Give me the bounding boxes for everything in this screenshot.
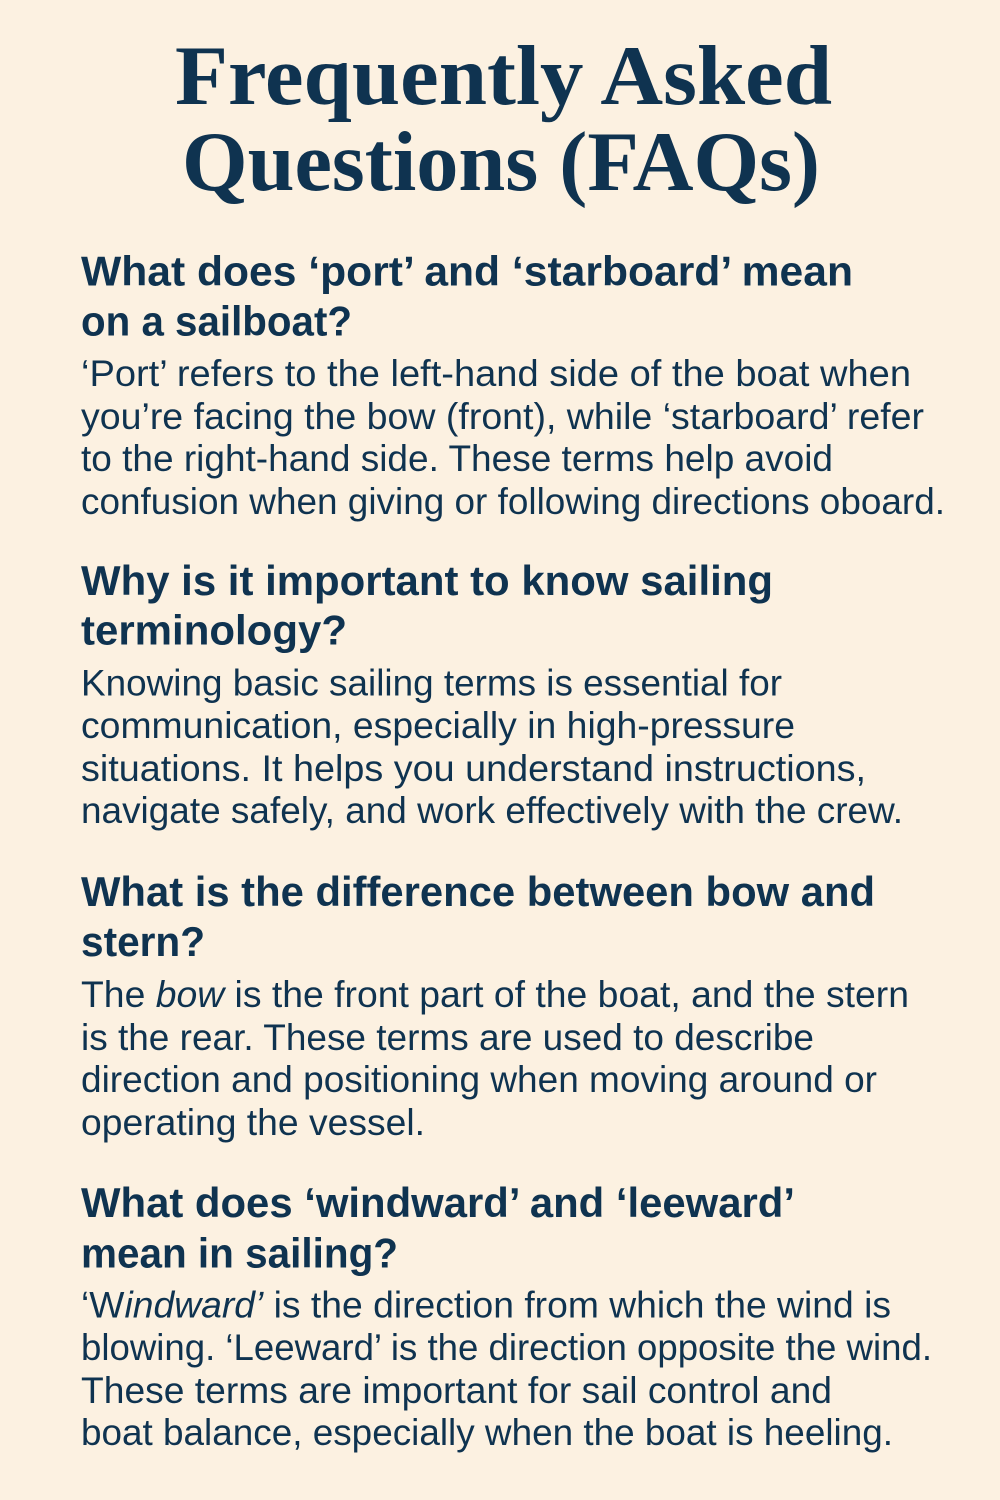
- panel: port and starboard: [81, 248, 945, 522]
- text block: bow and stern answer: direction and positioning when moving around or: [81, 1059, 877, 1100]
- text block: windward and leeward answer: [81, 1284, 932, 1453]
- text block: port and starboard answer: [81, 353, 945, 522]
- text block: bow and stern answer: operating the vessel.: [81, 1102, 425, 1143]
- panel: windward and leeward: [81, 1179, 932, 1453]
- text block: windward and leeward answer: boat balance, especially when the boat is heeling.: [81, 1412, 893, 1453]
- heading: port and starboard: [81, 248, 853, 344]
- text block: port and starboard answer: ‘Port’ refers to the left-hand side of the boat when: [81, 353, 911, 394]
- text block: sailing terminology answer: situations. It helps you understand instructions,: [81, 748, 866, 789]
- text block: sailing terminology answer: [81, 662, 903, 831]
- title: Questions (FAQs): [182, 115, 820, 209]
- heading: bow and stern: [81, 868, 875, 965]
- text block: port and starboard answer: confusion when giving or following directions oboard.: [81, 481, 945, 522]
- heading: port and starboard: on a sailboat?: [81, 298, 352, 344]
- heading: sailing terminology: Why is it important to know sailing: [81, 557, 773, 604]
- text block: windward and leeward answer: blowing. ‘Leeward’ is the direction opposite the wind.: [81, 1327, 932, 1368]
- text block: port and starboard answer: you’re facing the bow (front), while ‘starboard’ refer: [81, 396, 924, 437]
- text block: sailing terminology answer: Knowing basic sailing terms is essential for: [81, 662, 782, 704]
- text block: port and starboard answer: to the right-hand side. These terms help avoid: [81, 438, 833, 479]
- heading: sailing terminology: [81, 557, 773, 654]
- heading: windward and leeward: [81, 1179, 795, 1276]
- heading: windward and leeward: What does ‘windward’ and ‘leeward’: [81, 1179, 795, 1226]
- text block: windward and leeward answer: ‘Windward’ is the direction from which the wind is: [81, 1284, 891, 1326]
- text block: sailing terminology answer: navigate safely, and work effectively with the crew.: [81, 790, 903, 831]
- text block: windward and leeward answer: These terms are important for sail control and: [81, 1370, 832, 1411]
- heading: bow and stern: What is the difference between bow and: [81, 868, 875, 915]
- heading: sailing terminology: terminology?: [81, 606, 347, 654]
- title: [175, 29, 832, 209]
- text block: bow and stern answer: [81, 974, 909, 1143]
- panel: sailing terminology: [81, 557, 903, 831]
- panel: bow and stern: [81, 868, 909, 1143]
- heading: port and starboard: What does ‘port’ and ‘starboard’ mean: [81, 248, 853, 294]
- text block: sailing terminology answer: communication, especially in high-pressure: [81, 705, 795, 746]
- heading: windward and leeward: mean in sailing?: [81, 1230, 398, 1276]
- title: Frequently Asked: [175, 29, 832, 123]
- text block: bow and stern answer: The bow is the front part of the boat, and the stern: [81, 974, 909, 1015]
- text block: bow and stern answer: is the rear. These terms are used to describe: [81, 1017, 814, 1058]
- heading: bow and stern: stern?: [81, 918, 205, 965]
